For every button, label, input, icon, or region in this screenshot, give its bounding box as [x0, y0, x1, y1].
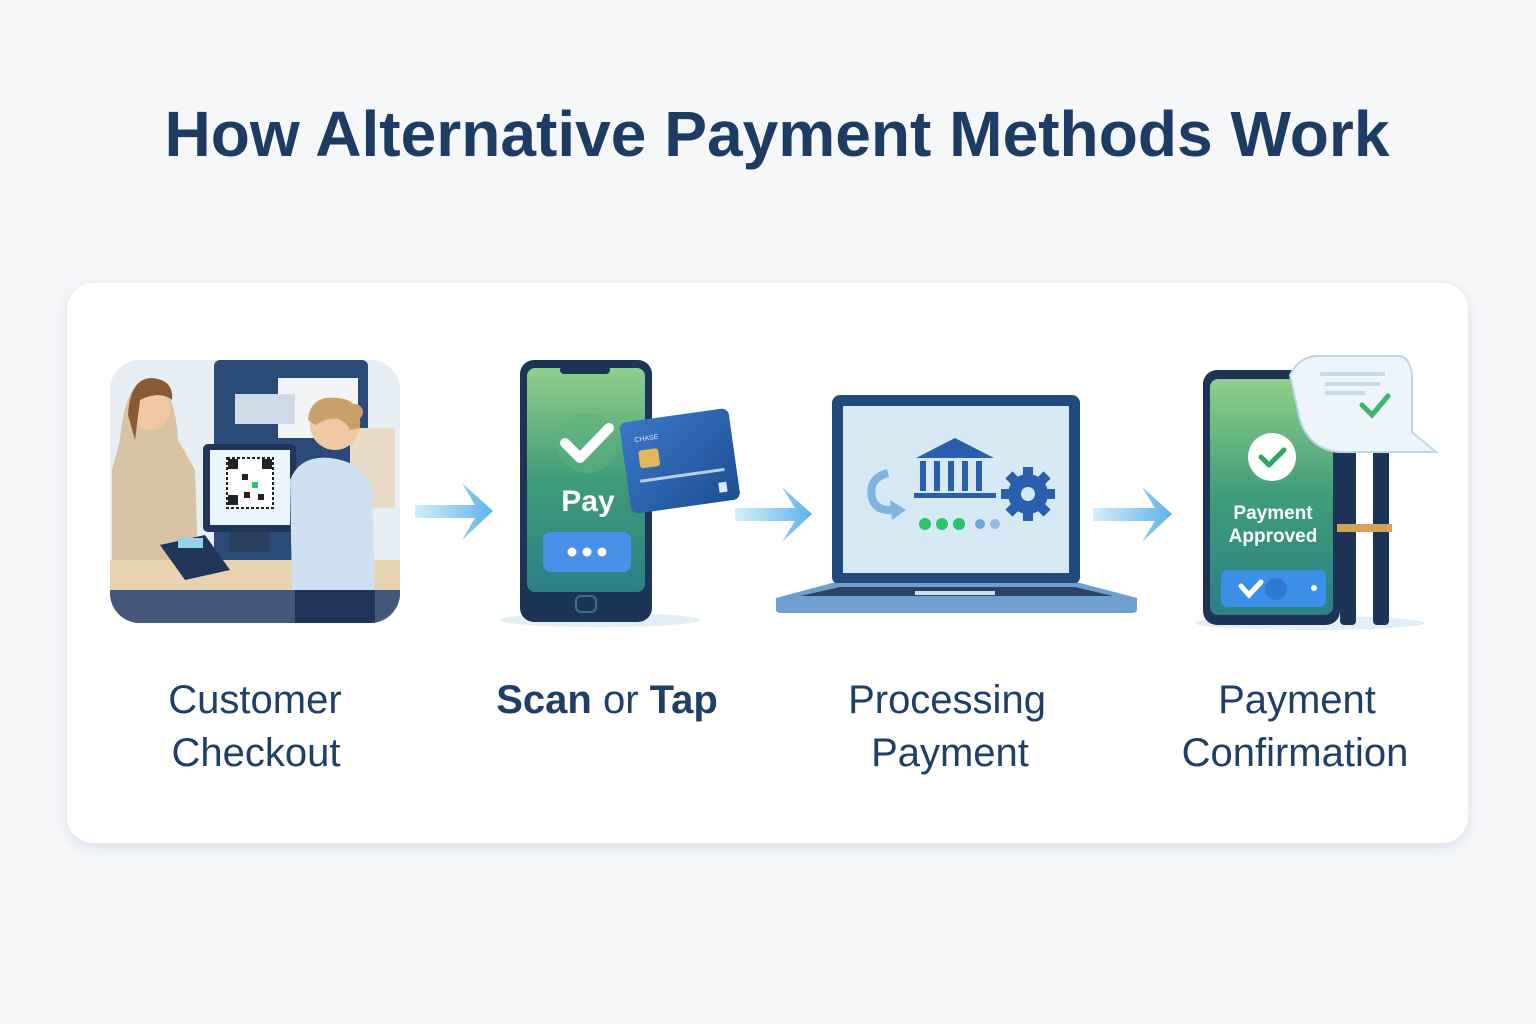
label: scan or tap: Scan or Tap — [496, 678, 718, 722]
label: customer checkout — [168, 678, 342, 775]
arrow 1 — [415, 483, 493, 540]
icon: bank — [914, 438, 996, 498]
illustration: payment confirmation phone — [1195, 356, 1436, 630]
title: How Alternative Payment Methods Work — [164, 98, 1390, 170]
arrow 3 — [1093, 487, 1172, 542]
illustration: phone scan or tap — [500, 360, 741, 627]
panel: steps card — [67, 283, 1468, 843]
person: customer — [290, 458, 375, 590]
credit card: CHASE — [634, 434, 659, 444]
label: processing payment — [848, 678, 1046, 775]
illustration: payment confirmation phone: Payment — [1233, 503, 1313, 524]
illustration: laptop processing — [776, 395, 1137, 613]
label: processing payment: Processing — [848, 678, 1046, 722]
label: customer checkout: Checkout — [172, 731, 340, 775]
label: payment confirmation — [1182, 678, 1408, 775]
person: cashier — [112, 380, 198, 560]
receipt — [1290, 356, 1436, 452]
illustration: customer checkout — [110, 360, 400, 623]
icon: gear — [1001, 467, 1055, 521]
label: processing payment: Payment — [871, 731, 1029, 775]
arrow 2 — [735, 487, 812, 542]
progress dots — [919, 518, 931, 530]
label: customer checkout: Customer — [168, 678, 342, 722]
icon: refresh arrow — [871, 473, 895, 510]
monitor with QR — [203, 444, 296, 532]
card terminal — [160, 535, 230, 580]
illustration: payment confirmation phone: Approved — [1229, 526, 1317, 547]
credit card — [619, 408, 741, 514]
label: payment confirmation: Payment — [1218, 678, 1376, 722]
illustration: phone scan or tap: Pay — [561, 485, 615, 518]
label: payment confirmation: Confirmation — [1182, 731, 1408, 775]
